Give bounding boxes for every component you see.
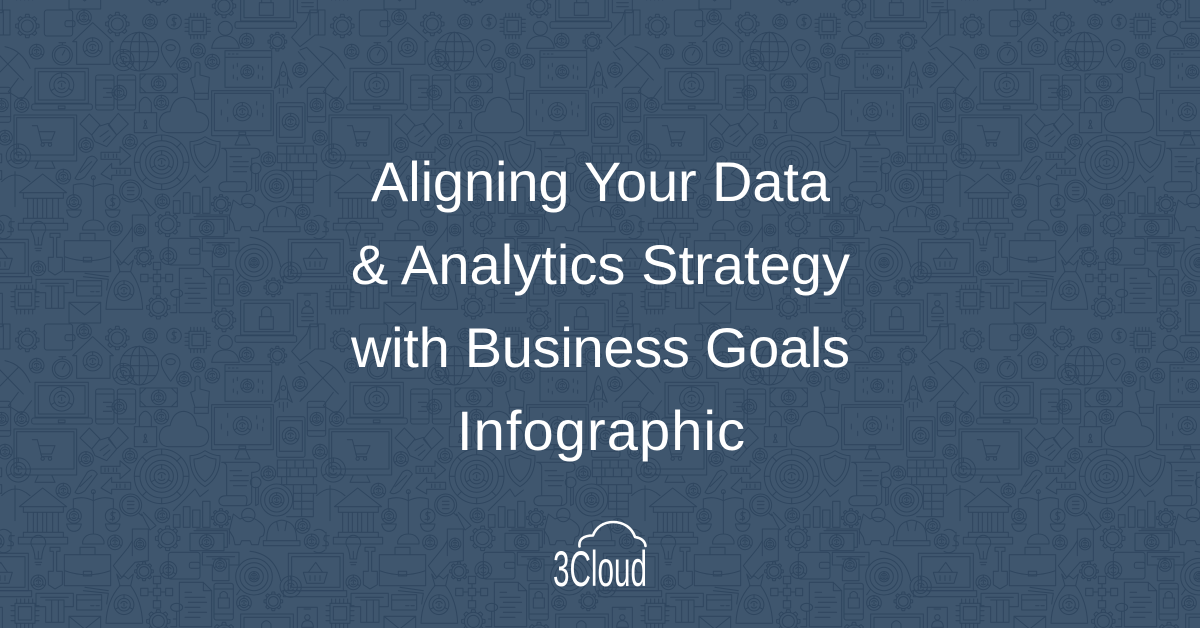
title: Infographic bbox=[457, 399, 745, 462]
logo wordmark: 3Cloud bbox=[553, 541, 647, 597]
title: Aligning Your Data bbox=[371, 150, 831, 213]
icon: cloud outline bbox=[579, 522, 646, 546]
title bbox=[350, 150, 850, 462]
title: & Analytics Strategy bbox=[351, 233, 850, 296]
title: with Business Goals bbox=[350, 316, 850, 379]
logo: 3Cloud bbox=[553, 522, 647, 597]
